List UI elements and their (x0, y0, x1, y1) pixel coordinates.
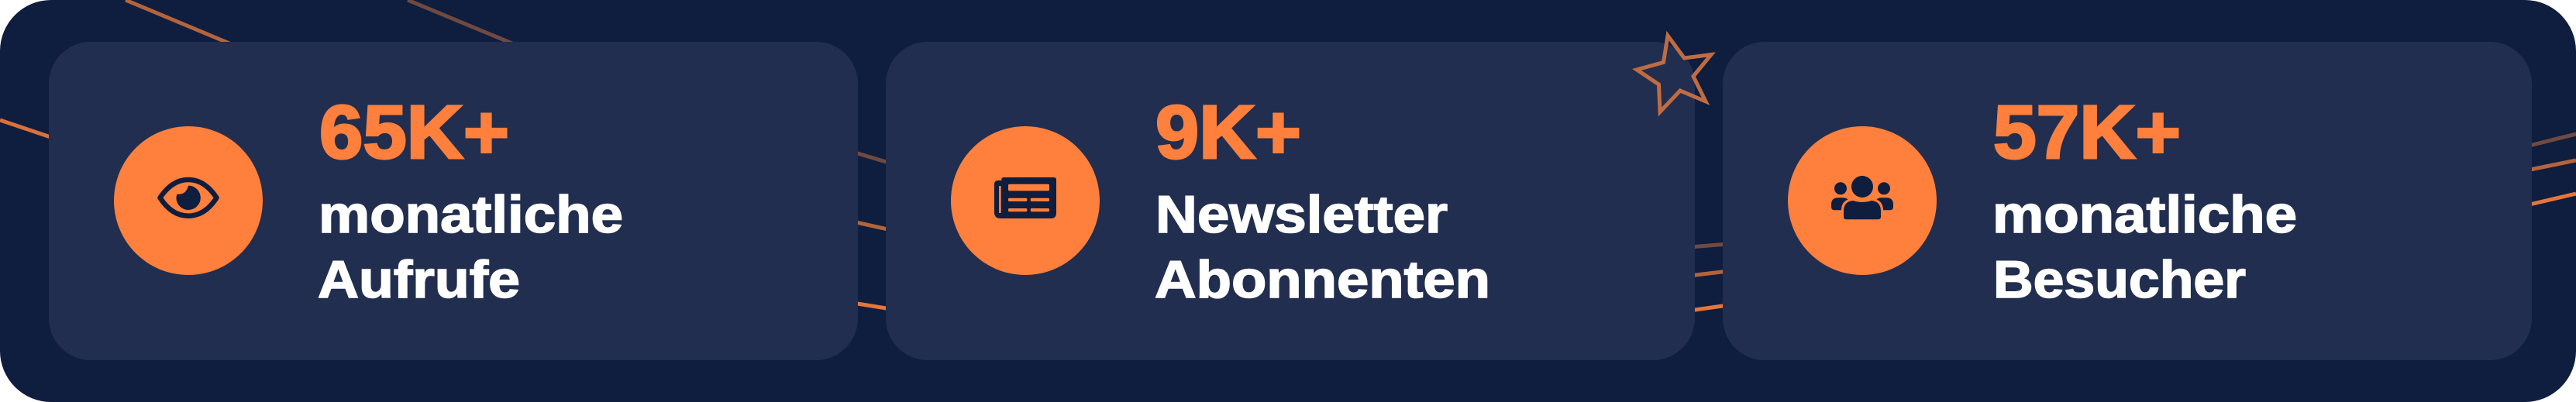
background lines (0, 0, 2576, 311)
panel: Newsletter Abonnenten (886, 42, 1695, 360)
label: Newsletter Abonnenten: Abonnenten (1155, 250, 1490, 309)
icon: people (1788, 126, 1937, 275)
label: Newsletter Abonnenten (1155, 185, 1490, 309)
panel: monatliche Aufrufe (49, 42, 858, 360)
label: monatliche Aufrufe: Aufrufe (318, 250, 520, 309)
stat: 65K+: 65K+ (319, 90, 509, 174)
icon: star outline (1637, 36, 1711, 112)
label: monatliche Besucher (1992, 185, 2297, 309)
label: monatliche Besucher: monatliche (1992, 185, 2297, 244)
stat: 9K+: 9K+ (1155, 90, 1301, 174)
panel: monatliche Besucher (1723, 42, 2532, 360)
label: monatliche Aufrufe: monatliche (319, 185, 623, 244)
icon: newspaper (951, 126, 1100, 275)
icon: eye (114, 126, 263, 275)
label: Newsletter Abonnenten: Newsletter (1155, 185, 1448, 244)
label: monatliche Aufrufe (318, 185, 623, 309)
label: monatliche Besucher: Besucher (1993, 250, 2246, 309)
stat: 57K+: 57K+ (1993, 90, 2181, 174)
